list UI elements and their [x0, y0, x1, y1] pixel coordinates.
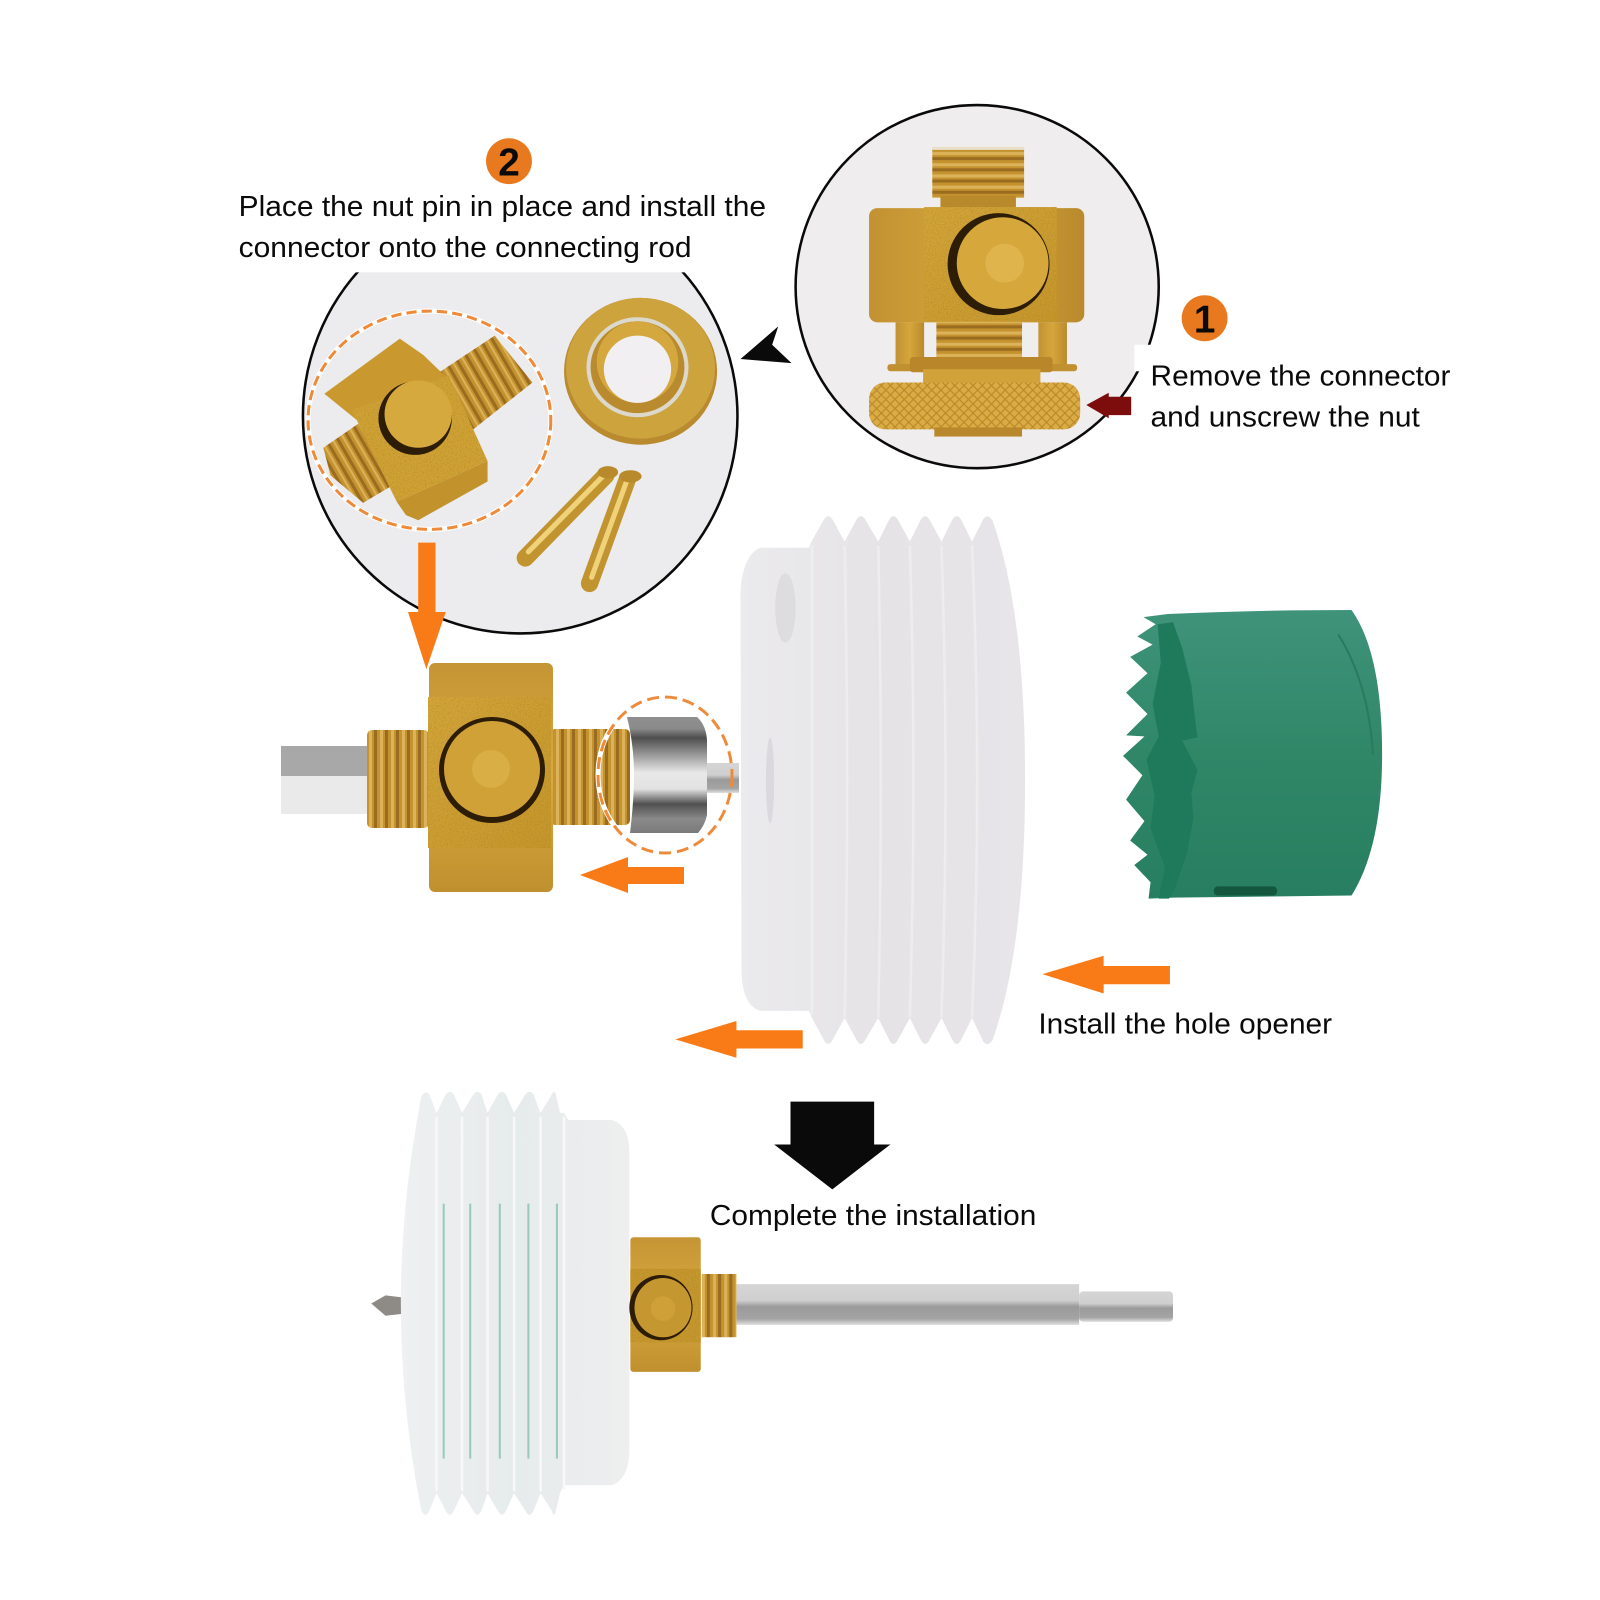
small shaft	[707, 763, 739, 793]
right thread	[550, 729, 630, 825]
panel: plastic dust cup	[741, 516, 1025, 1044]
badge: step 2	[486, 138, 532, 184]
badge: step 1	[1182, 295, 1228, 342]
white mask behind step 1 text	[1134, 345, 1175, 371]
arrow: orange left below hole saw	[1042, 956, 1170, 993]
dashed highlight ellipse	[598, 697, 732, 853]
hex rod	[281, 746, 369, 814]
dust cup finished	[401, 1092, 629, 1515]
panel: step 1 connector close-up	[796, 105, 1175, 468]
pin head	[948, 213, 1050, 315]
badge: step 2: 2	[498, 141, 520, 184]
arrow: orange down into connector	[408, 543, 446, 669]
text: step 1 instruction	[1151, 361, 1451, 433]
brass pins	[525, 466, 642, 583]
text: step 2 instruction: connector onto the connecting rod	[239, 232, 692, 264]
arrow: orange left	[580, 857, 684, 893]
dashed highlight ellipse	[308, 311, 551, 529]
text: step 1 instruction: Remove the connector	[1151, 361, 1451, 393]
knurled nut face up	[564, 298, 717, 445]
arrow: black down	[774, 1102, 890, 1189]
text: step 2 instruction: Place the nut pin in place and install the	[239, 191, 766, 223]
panel: main connector assembly	[281, 663, 739, 893]
text: install hole opener: Install the hole opener	[1038, 1008, 1332, 1040]
connector finished	[629, 1237, 701, 1372]
icon: black pointer between circles	[741, 326, 792, 363]
panel: step 2 parts close-up	[291, 189, 750, 633]
drill tip	[371, 1295, 403, 1316]
text: step 2 instruction	[239, 191, 766, 264]
thread finished	[702, 1274, 736, 1337]
connector rotated	[323, 336, 532, 520]
knurled nut	[869, 382, 1080, 437]
left thread	[367, 730, 429, 828]
text: step 1 instruction: and unscrew the nut	[1151, 401, 1420, 433]
icon: dark red arrow to nut	[1086, 393, 1131, 418]
lower pins and thread	[887, 322, 1077, 384]
badge: step 1: 1	[1194, 299, 1215, 342]
rod finished	[736, 1284, 1173, 1325]
arrow: orange left below dust cup	[675, 1021, 803, 1058]
text: complete installation: Complete the installation	[710, 1200, 1036, 1232]
silver magnet cylinder	[627, 717, 707, 833]
artwork	[239, 105, 1451, 1515]
panel: green hole saw	[1123, 610, 1382, 899]
connector body	[869, 207, 1084, 322]
panel: finished assembly	[371, 1092, 1173, 1515]
connector top thread	[932, 147, 1024, 210]
body	[428, 663, 553, 892]
